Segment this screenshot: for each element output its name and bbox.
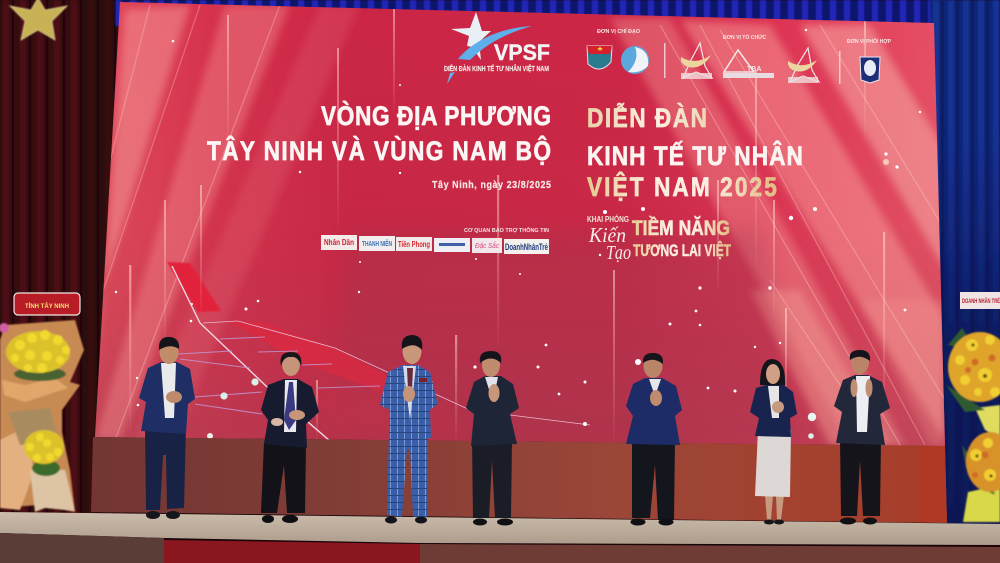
left red velvet curtain bbox=[0, 0, 125, 520]
label: coordinator: ĐƠN VỊ PHỐI HỢP bbox=[847, 38, 891, 45]
slogan script 2: Tạo bbox=[606, 242, 631, 264]
person 4 bbox=[466, 351, 519, 526]
light streaks bbox=[95, 5, 945, 445]
vertical light beams bbox=[129, 5, 885, 440]
stage front left bbox=[0, 533, 164, 563]
slogan small: KHAI PHÓNG bbox=[587, 215, 629, 224]
sponsor Doanh Nhân Trẻ: DoanhNhânTrẻ bbox=[505, 242, 548, 252]
sponsor Doanh Nhân Trẻ bbox=[504, 239, 549, 254]
person 1 bbox=[139, 337, 195, 519]
stage front right bbox=[420, 544, 1000, 563]
sponsor pink paper: Đặc Sắc bbox=[475, 241, 499, 250]
sponsor Nhân Dân: Nhân Dân bbox=[324, 238, 354, 247]
logo swoosh bbox=[458, 26, 532, 60]
title line 2: KINH TẾ TƯ NHÂN bbox=[587, 139, 803, 171]
LED screen backdrop bbox=[95, 2, 945, 446]
youth union badge bbox=[587, 46, 612, 69]
organiser logo one bbox=[681, 43, 712, 79]
person 3 bbox=[380, 335, 438, 524]
airplane wing bbox=[167, 262, 590, 441]
left sign bbox=[14, 293, 80, 315]
date line: Tây Ninh, ngày 23/8/2025 bbox=[432, 179, 552, 191]
person 6 bbox=[750, 359, 797, 524]
divider bbox=[664, 43, 666, 78]
sponsor Thanh Niên bbox=[359, 236, 395, 251]
sponsor Tiền Phong bbox=[396, 237, 432, 251]
student association badge bbox=[621, 46, 649, 74]
right sign bbox=[960, 292, 1000, 309]
label: organisers: ĐƠN VỊ TỔ CHỨC bbox=[723, 34, 766, 41]
coordinator shield bbox=[860, 57, 880, 83]
sponsors caption: CƠ QUAN BÁO TRỢ THÔNG TIN bbox=[464, 226, 549, 234]
organiser logo TBA bbox=[723, 50, 774, 78]
red carpet bbox=[164, 540, 420, 563]
left flower bouquet bbox=[0, 320, 84, 512]
right blue curtain bbox=[930, 0, 1000, 525]
stage back wall bbox=[91, 437, 947, 523]
slogan big 2: TƯƠNG LAI VIỆT bbox=[633, 241, 731, 260]
media sponsors bbox=[321, 226, 549, 254]
person 7 bbox=[834, 350, 890, 524]
sponsor Tiền Phong: Tiền Phong bbox=[398, 240, 430, 249]
slogan big 1: TIỀM NĂNG bbox=[632, 217, 730, 240]
logo star bbox=[451, 12, 491, 60]
VPSF logo bbox=[444, 12, 550, 84]
heading line 2: TÂY NINH VÀ VÙNG NAM BỘ bbox=[207, 134, 551, 166]
slogan script 1: Kiến bbox=[588, 223, 626, 247]
slogan bbox=[587, 215, 731, 264]
title line 1: DIỄN ĐÀN bbox=[587, 101, 707, 133]
sponsor Nhân Dân bbox=[321, 235, 357, 250]
organiser logo TBA: TBA bbox=[747, 66, 761, 73]
top blue curtain bbox=[115, 0, 945, 26]
right flower bouquet bbox=[946, 328, 1000, 522]
heading: regional round bbox=[207, 99, 551, 166]
sponsor Thanh Niên: THANH NIÊN bbox=[362, 239, 392, 248]
left sign: TỈNH TÂY NINH bbox=[25, 301, 69, 310]
person 5 bbox=[626, 353, 682, 526]
logo tagline: DIỄN ĐÀN KINH TẾ TƯ NHÂN VIỆT NAM bbox=[444, 63, 549, 73]
title line 3: VIỆT NAM 2025 bbox=[587, 170, 777, 202]
label: steering units: ĐƠN VỊ CHỈ ĐẠO bbox=[597, 28, 641, 35]
stage floor bbox=[0, 512, 1000, 545]
organiser logo three bbox=[788, 48, 819, 83]
forum title bbox=[587, 101, 803, 202]
sponsor blue paper bbox=[434, 238, 470, 252]
logo wordmark: VPSF bbox=[494, 40, 550, 65]
person 2 bbox=[261, 352, 319, 523]
sponsor pink paper bbox=[472, 238, 502, 253]
heading line 1: VÒNG ĐỊA PHƯƠNG bbox=[321, 99, 551, 131]
divider bbox=[839, 51, 840, 84]
organiser logos bbox=[587, 28, 891, 84]
star dots bbox=[115, 29, 921, 439]
gold star decoration bbox=[10, 0, 67, 40]
